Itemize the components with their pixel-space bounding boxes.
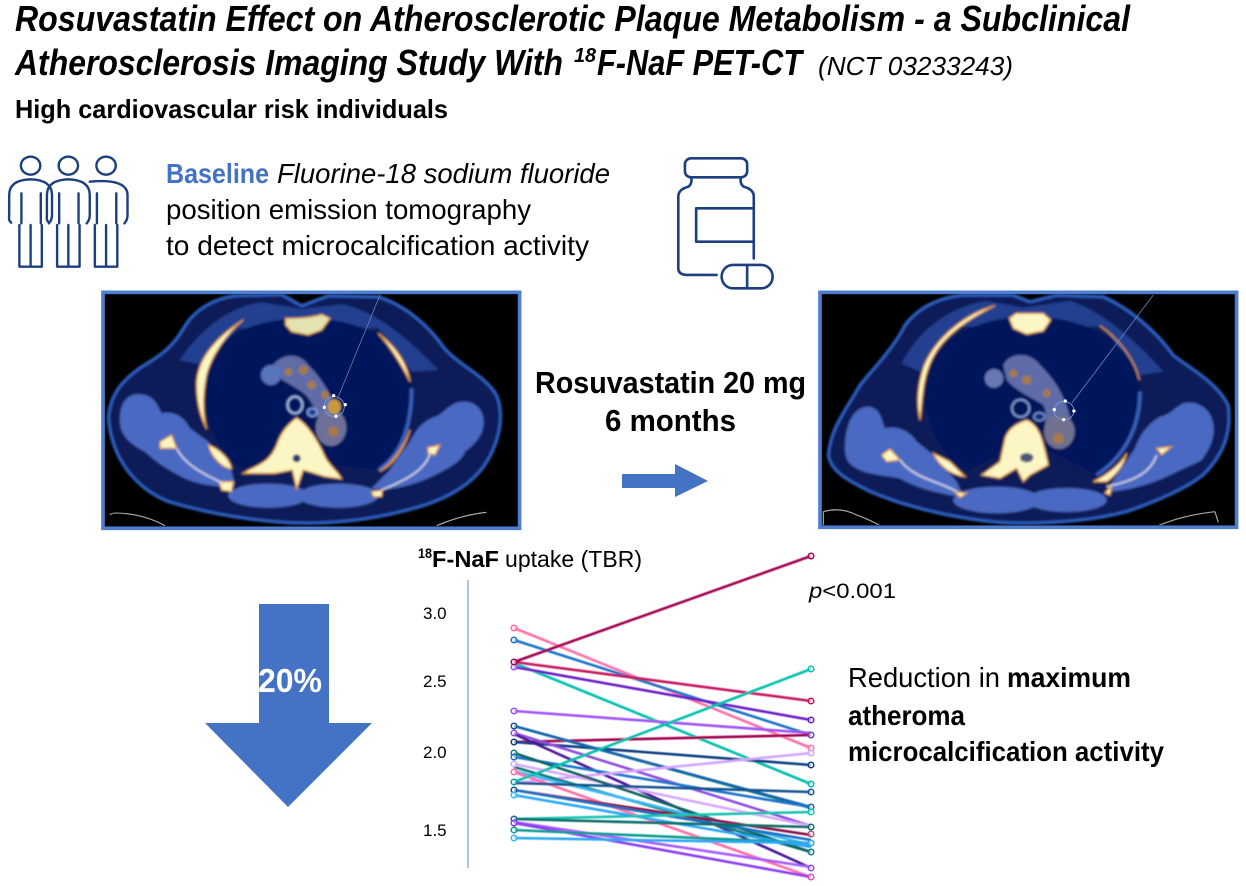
arrow: 20% reduction: [205, 604, 372, 807]
conclusion text: microcalcification activity: [848, 736, 1164, 767]
baseline description text: to detect microcalcification activity: [166, 230, 589, 261]
aorta: [1002, 353, 1072, 425]
y axis labels: 2.0: [423, 743, 447, 762]
chart axis title: F-NaF: [432, 546, 499, 572]
lung field: [205, 318, 412, 470]
treatment label: Rosuvastatin 20 mg: [535, 365, 806, 400]
paired patient lines: [514, 556, 811, 877]
conclusion text: [848, 662, 1164, 767]
title: [14, 0, 1131, 83]
muscle tissue: [120, 394, 484, 508]
scan: follow-up PET-CT: [820, 292, 1237, 527]
p value: p<0.001: [808, 580, 896, 603]
scan: baseline PET-CT: [103, 292, 520, 528]
y axis labels: 2.5: [423, 672, 447, 691]
line end markers: [511, 553, 814, 880]
y axis labels: 1.5: [423, 821, 447, 840]
muscle tissue: [845, 403, 1214, 513]
bones: [160, 314, 440, 497]
chart axis title: uptake (TBR): [505, 546, 642, 572]
baseline description text: Baseline: [166, 158, 269, 189]
subtitle: High cardiovascular risk individuals: [15, 94, 448, 124]
baseline description text: Fluorine-18 sodium fluoride: [277, 158, 610, 189]
conclusion text: maximum: [1007, 662, 1131, 693]
icon: medicine bottle and pill: [678, 158, 773, 288]
title: F-NaF PET-CT: [597, 42, 805, 83]
title: 18: [574, 45, 597, 67]
title: (NCT 03233243): [818, 51, 1013, 81]
chart axis title: 18: [418, 545, 432, 561]
y axis: [467, 580, 469, 868]
treatment label: [535, 365, 806, 438]
bones: [882, 306, 1172, 498]
y axis labels: 3.0: [423, 604, 447, 623]
chart: 18F-NaF uptake paired lines: [418, 545, 814, 880]
arrow: 20% reduction: 20%: [258, 662, 322, 699]
chart axis title: [418, 545, 642, 572]
title: Atherosclerosis Imaging Study With: [14, 42, 563, 83]
conclusion text: atheroma: [848, 700, 965, 731]
treatment label: 6 months: [605, 403, 736, 438]
y axis labels: [423, 604, 447, 840]
icon: group of people: [9, 157, 128, 267]
aorta: [272, 354, 334, 418]
baseline description text: position emission tomography: [166, 194, 531, 225]
conclusion text: Reduction in: [848, 662, 1000, 693]
baseline description text: [166, 158, 610, 261]
lung field: [925, 317, 1140, 475]
arrow: treatment to follow-up: [622, 464, 708, 497]
